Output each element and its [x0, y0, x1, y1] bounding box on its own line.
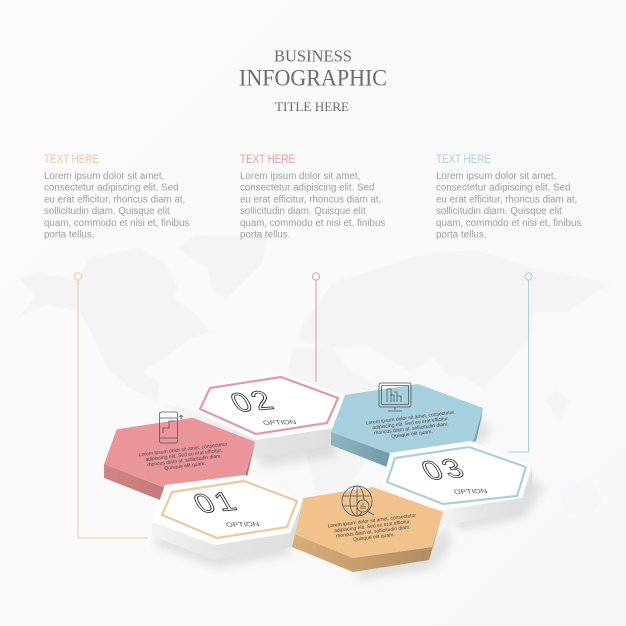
- icon: monitor chart: [379, 383, 411, 411]
- text block: column 3: quam, commodo et nisi et, finibus: [436, 218, 581, 229]
- label option: OPTION: [225, 520, 260, 529]
- label option: OPTION: [453, 487, 488, 496]
- connector: red: [312, 273, 320, 382]
- hexagon 01: white: [152, 475, 303, 560]
- blue hexagon caption: Lorem ipsum dolor sit amet, consectetur: [366, 410, 455, 426]
- red hexagon caption: Lorem ipsum dolor sit amet, consectetur: [139, 441, 228, 458]
- text block: column 3: sollicitudin diam. Quisque elit: [436, 206, 562, 217]
- text block: column 3: eu erat efficitur, rhoncus diam at,: [436, 194, 577, 205]
- label option: OPTION: [262, 418, 297, 427]
- icon: phone chart: [160, 412, 182, 443]
- text block: column 1: quam, commodo et nisi et, finibus: [44, 218, 189, 229]
- text block: column 2: Lorem ipsum dolor sit amet,: [240, 171, 360, 182]
- text block: column 1: [44, 152, 189, 240]
- text block: column 2: TEXT HERE: [240, 152, 295, 166]
- red hexagon caption: Quisque elit quam.: [164, 461, 206, 472]
- orange hexagon caption: rhoncus diam at, sollicitudin diam.: [336, 524, 411, 540]
- title: INFOGRAPHIC: [239, 66, 387, 92]
- text block: column 2: sollicitudin diam. Quisque elit: [240, 206, 366, 217]
- text block: column 2: eu erat efficitur, rhoncus diam at,: [240, 194, 381, 205]
- blue hexagon caption: Quisque elit quam.: [391, 429, 433, 440]
- text block: column 3: Lorem ipsum dolor sit amet,: [436, 171, 556, 182]
- text block: column 3: porta tellus.: [436, 230, 486, 240]
- text block: column 2: consectetur adipiscing elit. Sed: [240, 183, 374, 194]
- red hexagon caption: [139, 441, 230, 475]
- title: BUSINESS: [274, 46, 352, 66]
- orange hexagon caption: adipiscing elit. Sed eu erat efficitur,: [334, 519, 411, 534]
- text block: column 3: [436, 152, 581, 240]
- connector: orange: [74, 273, 148, 538]
- orange hexagon caption: [327, 513, 419, 546]
- hexagon blue: [331, 383, 483, 467]
- text block: column 2: porta tellus.: [240, 230, 290, 240]
- drop shadows: [155, 415, 544, 580]
- title: [239, 46, 387, 114]
- red hexagon caption: adipiscing elit. Sed eu erat efficitur,: [145, 448, 222, 463]
- text block: column 1: eu erat efficitur, rhoncus diam at,: [44, 194, 185, 205]
- orange hexagon caption: Quisque elit quam.: [353, 532, 395, 543]
- hexagon 02: white: [195, 373, 344, 457]
- hexagon 03: white: [382, 441, 532, 525]
- red hexagon caption: rhoncus diam at, sollicitudin diam.: [147, 453, 222, 468]
- number 03: 03: [416, 454, 473, 486]
- connector: blue: [508, 273, 532, 452]
- text block: column 1: Lorem ipsum dolor sit amet,: [44, 171, 164, 182]
- text block: column 2: [240, 152, 385, 240]
- icon: globe with magnifier: [342, 486, 374, 516]
- blue hexagon caption: rhoncus diam at, sollicitudin diam.: [374, 421, 449, 437]
- title: TITLE HERE: [275, 99, 349, 114]
- hexagon red: [104, 412, 255, 500]
- blue hexagon caption: adipiscing elit. Sed eu erat efficitur,: [372, 416, 449, 431]
- hexagon orange: [292, 486, 443, 572]
- orange hexagon caption: Lorem ipsum dolor sit amet, consectetur: [327, 513, 417, 529]
- text block: column 1: porta tellus.: [44, 230, 94, 240]
- text block: column 3: TEXT HERE: [436, 152, 491, 166]
- text block: column 1: consectetur adipiscing elit. Sed: [44, 183, 178, 194]
- number 02: 02: [225, 386, 282, 418]
- number 01: 01: [188, 487, 245, 519]
- world map: [18, 235, 610, 520]
- text block: column 2: quam, commodo et nisi et, finibus: [240, 218, 385, 229]
- blue hexagon caption: [366, 410, 457, 443]
- text block: column 1: sollicitudin diam. Quisque elit: [44, 206, 170, 217]
- text block: column 3: consectetur adipiscing elit. Sed: [436, 183, 570, 194]
- text block: column 1: TEXT HERE: [44, 152, 99, 166]
